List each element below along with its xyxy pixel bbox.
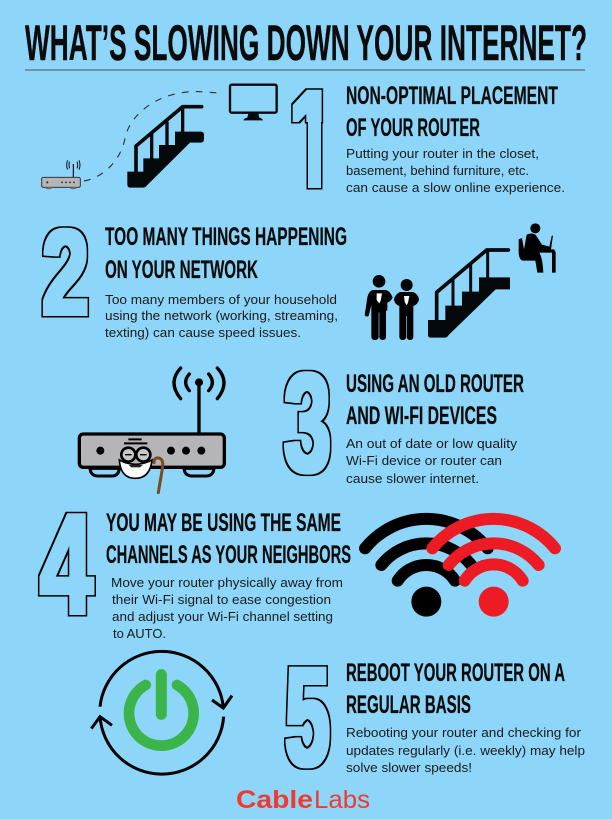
- text block: texting) can cause speed issues.: [105, 325, 301, 340]
- text block: [111, 575, 343, 641]
- text block: [346, 436, 518, 486]
- panel: step 3: [79, 344, 524, 501]
- numeral 5: 5: [285, 638, 330, 795]
- numeral 2: 2: [42, 204, 89, 340]
- heading: OF YOUR ROUTER: [346, 114, 480, 142]
- heading: [346, 82, 558, 142]
- numeral 3: 3: [284, 344, 331, 501]
- text block: Move your router physically away from: [111, 575, 343, 590]
- heading: ON YOUR NETWORK: [105, 256, 258, 284]
- numeral 1: 1: [289, 63, 335, 216]
- heading: [346, 659, 565, 719]
- icon: power button with reboot arrows: [91, 651, 232, 774]
- numeral 4: 4: [40, 485, 93, 644]
- text block: basement, behind furniture, etc.: [346, 163, 529, 178]
- heading: [106, 509, 351, 569]
- text block: to AUTO.: [113, 626, 166, 641]
- text block: Too many members of your household: [105, 292, 337, 307]
- heading: AND WI-FI DEVICES: [346, 402, 497, 430]
- heading: [105, 223, 347, 284]
- text block: cause slower internet.: [346, 471, 479, 486]
- panel: step 5: [91, 638, 585, 795]
- heading: TOO MANY THINGS HAPPENING: [105, 223, 347, 251]
- text block: can cause a slow online experience.: [346, 180, 565, 195]
- illustration: router, stairs and monitor: [42, 85, 277, 189]
- logo: CableLabs: Labs: [314, 786, 370, 814]
- heading: [346, 370, 524, 430]
- logo: CableLabs: [236, 786, 370, 814]
- logo: CableLabs: Cable: [236, 786, 313, 814]
- heading: REGULAR BASIS: [346, 691, 471, 719]
- panel: step 1: [41, 84, 564, 194]
- illustration: old router with glasses and cane: [79, 368, 224, 493]
- text block: [105, 292, 338, 340]
- text block: [346, 725, 585, 775]
- text block: updates regularly (i.e. weekly) may help: [346, 743, 585, 758]
- heading: YOU MAY BE USING THE SAME: [106, 509, 341, 537]
- icon: overlapping wi-fi signals: [365, 519, 555, 617]
- text block: Rebooting your router and checking for: [346, 725, 582, 740]
- panel: step 4: [40, 485, 555, 644]
- text block: An out of date or low quality: [346, 436, 518, 451]
- panel: step 2: [42, 204, 556, 340]
- heading: CHANNELS AS YOUR NEIGHBORS: [106, 541, 351, 569]
- text block: and adjust your Wi-Fi channel setting: [112, 609, 333, 624]
- text block: Putting your router in the closet,: [346, 146, 539, 161]
- illustration: people, stairs and person at laptop: [365, 223, 556, 340]
- text block: using the network (working, streaming,: [105, 308, 338, 323]
- text block: solve slower speeds!: [346, 760, 472, 775]
- text block: Wi-Fi device or router can: [346, 453, 502, 468]
- text block: [346, 146, 565, 195]
- text block: their Wi-Fi signal to ease congestion: [112, 592, 331, 607]
